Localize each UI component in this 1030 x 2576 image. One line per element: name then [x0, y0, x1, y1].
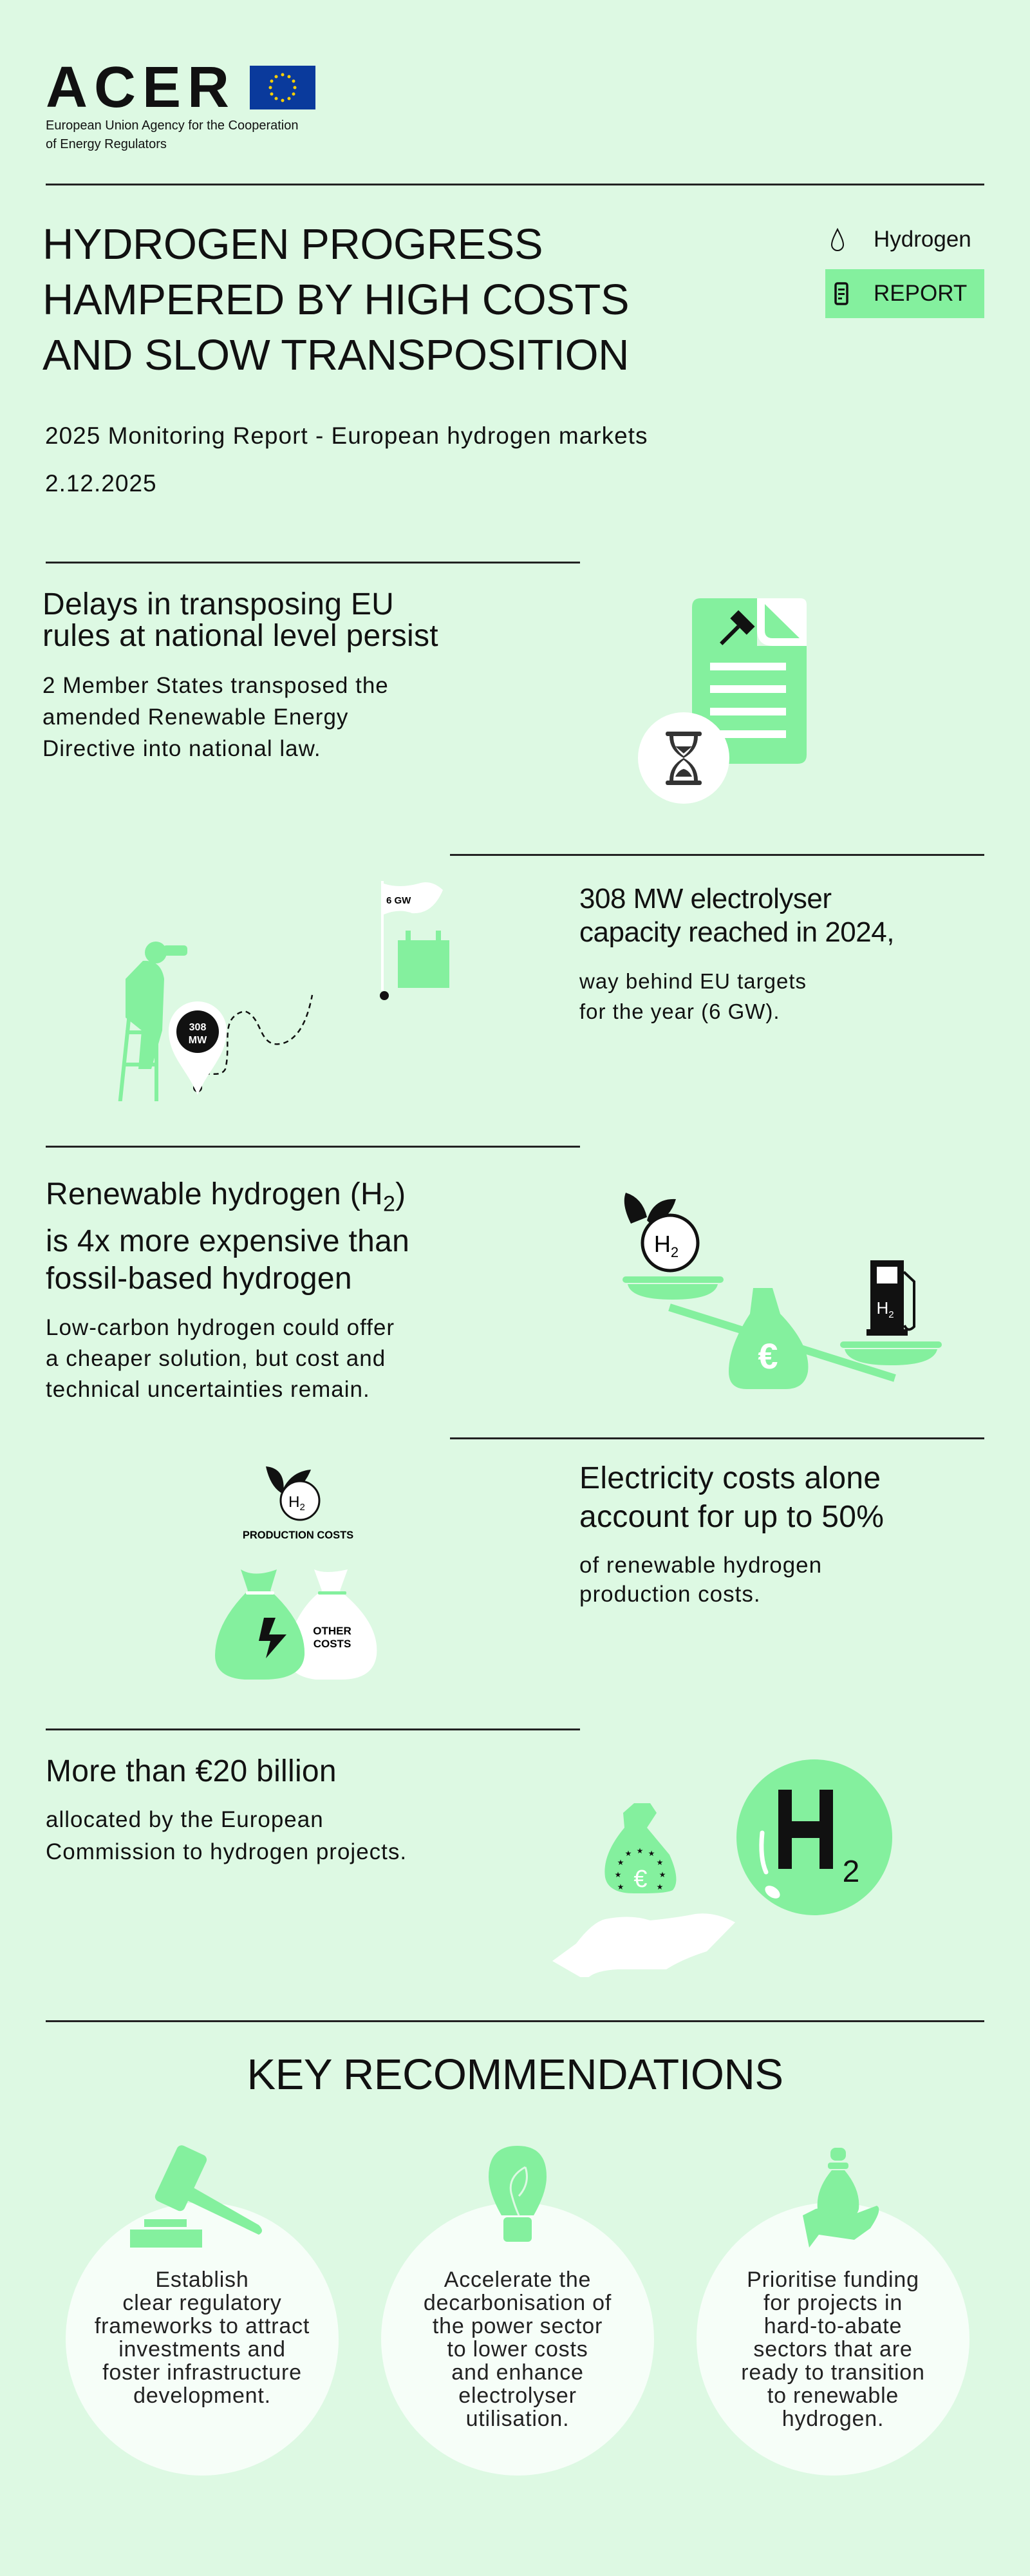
recommendation 1 [66, 2145, 339, 2476]
illustration: person, path and 6 GW flag: 308 [189, 1022, 206, 1033]
icon: hand with euro bag and H2 bubble: ★ [617, 1858, 624, 1867]
body: 2 Member States transposed the [42, 673, 389, 698]
text [741, 2268, 925, 2431]
body: production costs. [579, 1582, 761, 1607]
circle [381, 2202, 654, 2476]
text: the power sector [433, 2314, 603, 2338]
icon: balance scale: 2 [888, 1309, 894, 1320]
icon: hand with euro bag and H2 bubble: ★ [637, 1846, 643, 1855]
body: way behind EU targets [579, 969, 807, 993]
tag: Hydrogen [831, 227, 971, 252]
text: Prioritise funding [747, 2268, 919, 2292]
text: decarbonisation of [424, 2291, 612, 2315]
subtitle: 2025 Monitoring Report - European hydrogen markets [45, 422, 648, 449]
logo subtitle [46, 118, 299, 151]
section: electrolyser capacity [579, 883, 894, 1023]
illustration: person, path and 6 GW flag: 6 GW [386, 895, 411, 906]
icon: production costs bags: OTHER [313, 1625, 351, 1637]
icon: hand with euro bag and H2 bubble [552, 1759, 892, 1977]
text: to renewable [767, 2383, 899, 2408]
icon: document with gavel and hourglass [638, 598, 807, 804]
icon: balance scale: 2 [671, 1244, 679, 1260]
logo subtitle: European Union Agency for the Cooperation [46, 118, 299, 133]
recommendation 3 [697, 2148, 969, 2476]
title: AND SLOW TRANSPOSITION [42, 331, 629, 379]
icon: hand with euro bag and H2 bubble: ★ [657, 1858, 663, 1867]
body: Low-carbon hydrogen could offer [46, 1315, 395, 1340]
title: HAMPERED BY HIGH COSTS [42, 276, 629, 324]
text [95, 2268, 310, 2408]
body: Directive into national law. [42, 736, 321, 761]
icon: production costs bags: COSTS [314, 1638, 351, 1650]
text: investments and [118, 2337, 286, 2362]
body: allocated by the European [46, 1807, 324, 1832]
heading: is 4x more expensive than [46, 1224, 409, 1258]
recommendation 2 [381, 2146, 654, 2476]
text: development. [133, 2383, 271, 2408]
icon: bulb with leaf [489, 2146, 547, 2242]
section: renewable hydrogen cost [46, 1177, 409, 1402]
heading: fossil-based hydrogen [46, 1262, 352, 1296]
text: ready to transition [741, 2360, 925, 2385]
text [424, 2268, 612, 2431]
icon: hand with euro bag and H2 bubble: ★ [659, 1870, 666, 1879]
body: a cheaper solution, but cost and [46, 1346, 386, 1371]
icon: hand with euro bag and H2 bubble: ★ [625, 1849, 632, 1858]
icon: balance scale: € [758, 1336, 778, 1376]
icon: hand with euro bag and H2 bubble: 2 [843, 1855, 859, 1889]
tag: REPORT [825, 269, 984, 318]
body: of renewable hydrogen [579, 1553, 822, 1578]
body [579, 1553, 822, 1607]
body: amended Renewable Energy [42, 705, 348, 730]
icon: production costs bags [215, 1466, 377, 1680]
heading: account for up to 50% [579, 1500, 884, 1534]
heading: 308 MW electrolyser [579, 883, 832, 914]
circle [697, 2202, 969, 2476]
text: Establish [155, 2268, 249, 2292]
section: transposition delays [42, 587, 438, 761]
body [46, 1807, 407, 1864]
logo wordmark: ACER [46, 55, 236, 120]
icon: balance scale [623, 1193, 942, 1389]
text: sectors that are [753, 2337, 913, 2362]
section: electricity costs [579, 1461, 884, 1607]
heading: rules at national level persist [42, 619, 438, 653]
illustration: person, path and 6 GW flag [118, 881, 449, 1101]
circle [66, 2202, 339, 2476]
heading [579, 883, 894, 948]
heading [46, 1177, 409, 1296]
text: Accelerate the [444, 2268, 591, 2292]
text: to lower costs [447, 2337, 588, 2362]
icon: hand with money bag [803, 2148, 879, 2248]
icon: production costs bags: PRODUCTION COSTS [243, 1530, 353, 1541]
tag: REPORT: REPORT [874, 281, 967, 306]
icon: hand with euro bag and H2 bubble: ★ [648, 1849, 655, 1858]
text: frameworks to attract [95, 2314, 310, 2338]
text: foster infrastructure [102, 2360, 302, 2385]
body: Commission to hydrogen projects. [46, 1839, 407, 1864]
heading: Renewable hydrogen (H2) [46, 1177, 406, 1217]
icon: balance scale: H [654, 1231, 671, 1257]
heading: key recommendations: KEY RECOMMENDATIONS [247, 2050, 783, 2099]
text: utilisation. [466, 2407, 569, 2431]
body [46, 1315, 395, 1402]
icon: drop [831, 228, 844, 251]
heading [42, 587, 438, 653]
text: clear regulatory [122, 2291, 282, 2315]
icon: gavel [130, 2145, 262, 2248]
text: hydrogen. [782, 2407, 884, 2431]
heading: More than €20 billion [46, 1754, 337, 1788]
illustration: person, path and 6 GW flag: MW [189, 1035, 207, 1046]
heading: capacity reached in 2024, [579, 916, 894, 948]
heading [579, 1461, 884, 1534]
icon: hand with euro bag and H2 bubble: € [633, 1866, 648, 1893]
body: technical uncertainties remain. [46, 1377, 370, 1402]
body [579, 969, 807, 1023]
icon: hand with euro bag and H2 bubble: ★ [617, 1882, 624, 1891]
text: electrolyser [458, 2383, 577, 2408]
title: HYDROGEN PROGRESS [42, 220, 543, 269]
logo: ACER [46, 55, 315, 151]
icon: production costs bags: H [288, 1493, 300, 1511]
icon: production costs bags: 2 [300, 1502, 305, 1513]
text: and enhance [451, 2360, 584, 2385]
icon: EU flag [250, 66, 315, 109]
tag: Hydrogen: Hydrogen [874, 227, 971, 252]
title [42, 220, 629, 379]
section: €20 billion funding [46, 1754, 407, 1864]
logo subtitle: of Energy Regulators [46, 137, 167, 151]
body [42, 673, 389, 761]
body: for the year (6 GW). [579, 999, 780, 1023]
date: 2.12.2025 [45, 470, 157, 497]
icon: document [834, 282, 848, 305]
icon: balance scale: H [876, 1298, 888, 1318]
text: for projects in [763, 2291, 903, 2315]
icon: hand with euro bag and H2 bubble: ★ [615, 1870, 621, 1879]
text: hard-to-abate [764, 2314, 902, 2338]
icon: hand with euro bag and H2 bubble: ★ [657, 1882, 663, 1891]
heading: Delays in transposing EU [42, 587, 394, 621]
heading: Electricity costs alone [579, 1461, 881, 1495]
